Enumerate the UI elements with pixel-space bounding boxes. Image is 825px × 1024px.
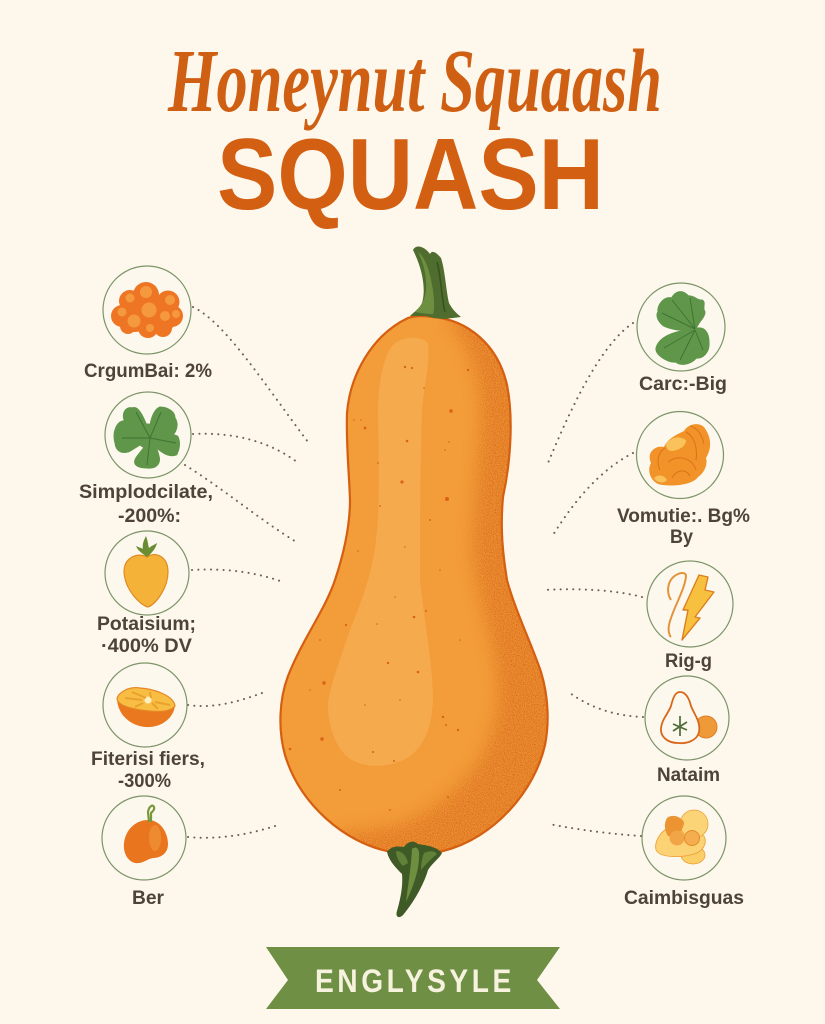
illustration: honeynut squash bbox=[280, 247, 560, 917]
squash body bbox=[280, 316, 548, 855]
callout: Nataim bbox=[645, 676, 729, 786]
callout: Simplodcilate bbox=[79, 392, 213, 527]
callout: CrgumBai bbox=[84, 266, 212, 382]
body highlight bbox=[328, 338, 433, 766]
label: CrgumBai: 2% bbox=[84, 361, 212, 382]
icon: orange fruit bbox=[124, 806, 168, 863]
specks bbox=[289, 366, 469, 811]
value: -300% bbox=[118, 771, 171, 792]
banner text: ENGLYSYLE bbox=[315, 964, 511, 999]
banner bbox=[266, 947, 560, 1009]
icon: halved orange bbox=[117, 688, 175, 727]
callout: Carc bbox=[637, 283, 727, 395]
callout: Caimbisguas bbox=[624, 796, 744, 909]
icon: green leaf bbox=[657, 293, 708, 363]
right side stipple shading bbox=[356, 328, 546, 850]
callout: Vomutie bbox=[617, 412, 750, 548]
title bbox=[167, 32, 662, 231]
label: Fiterisi fiers, bbox=[91, 749, 205, 770]
callout: Fiterisi fiers bbox=[91, 663, 205, 792]
label: Potaisium; bbox=[97, 614, 196, 635]
icon: pear outline bbox=[661, 692, 717, 743]
squash outline bbox=[280, 316, 548, 855]
label: Vomutie:. Bg% bbox=[617, 506, 750, 527]
label: Nataim bbox=[657, 765, 720, 786]
value: -200%: bbox=[118, 506, 181, 527]
icon: hook and lightning bolt bbox=[668, 573, 714, 640]
icon: yellow fruit bbox=[124, 536, 168, 607]
connector lines bbox=[185, 307, 643, 838]
top stem bbox=[410, 247, 461, 319]
label: Caimbisguas bbox=[624, 888, 744, 909]
bottom stem bbox=[387, 842, 442, 917]
value: By bbox=[670, 527, 693, 548]
icon: orange cluster bbox=[111, 282, 183, 338]
icon: green leaf bbox=[115, 408, 179, 467]
callout: Ber bbox=[102, 796, 186, 909]
label: Rig-g bbox=[665, 651, 712, 672]
value: ·400% DV bbox=[101, 636, 192, 657]
icon: yellow petals bbox=[656, 810, 708, 864]
icon: orange curls bbox=[649, 424, 710, 486]
title bold line: SQUASH bbox=[217, 119, 604, 231]
callout: Potaisium bbox=[97, 531, 196, 657]
label: Simplodcilate, bbox=[79, 482, 213, 503]
label: Carc:-Big bbox=[639, 374, 727, 395]
callout: Rig-g bbox=[647, 561, 733, 672]
label: Ber bbox=[132, 888, 165, 909]
